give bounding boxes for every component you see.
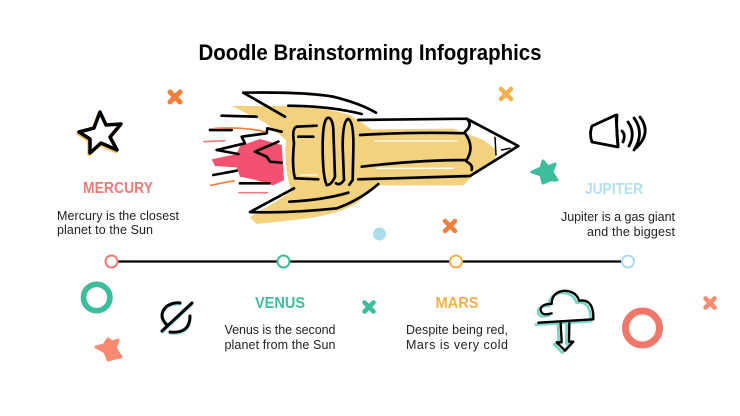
green ring	[84, 284, 110, 311]
text: mercury description: planet to the Sun	[57, 223, 153, 237]
heading: mars: MARS	[436, 295, 478, 312]
green star	[532, 161, 557, 183]
text: jupiter description: and the biggest	[587, 225, 676, 239]
coral star	[96, 339, 121, 360]
green cross	[364, 302, 374, 312]
rocket coloured exhaust lines	[204, 128, 267, 193]
text: jupiter description: Jupiter is a gas giant	[561, 210, 676, 224]
title: Doodle Brainstorming Infographics	[198, 40, 542, 65]
orange cross	[445, 221, 455, 231]
icon: star	[78, 112, 121, 154]
panel: mars	[406, 291, 593, 353]
orange cross	[170, 92, 180, 102]
icon: cloud with arrow	[536, 291, 593, 353]
rocket outlines	[210, 92, 518, 212]
rocket yellow paint	[232, 106, 497, 224]
heading: jupiter: JUPITER	[585, 181, 643, 198]
marker: mars	[450, 256, 462, 268]
text: mercury description: Mercury is the closest	[57, 209, 180, 223]
panel: venus	[162, 295, 336, 352]
icon: crossed circle	[162, 303, 192, 334]
rocket pencil illustration	[204, 92, 518, 224]
timeline	[106, 256, 634, 268]
icon: speaker	[590, 115, 645, 150]
blue dot	[373, 228, 386, 240]
yellow cross	[501, 89, 511, 99]
panel: jupiter	[561, 115, 676, 239]
decorative shapes	[84, 89, 714, 360]
heading: venus: VENUS	[255, 295, 305, 312]
text: venus description: planet from the Sun	[224, 338, 336, 352]
rocket flame	[212, 139, 284, 185]
rocket white highlights	[300, 141, 457, 175]
marker: jupiter	[622, 256, 634, 268]
text: mars description: Despite being red,	[406, 323, 508, 337]
marker: venus	[278, 256, 290, 268]
coral ring	[626, 311, 660, 345]
text: mars description: Mars is very cold	[406, 338, 508, 352]
coral cross	[706, 298, 714, 308]
panel: mercury	[57, 112, 180, 237]
text: venus description: Venus is the second	[224, 323, 336, 337]
heading: mercury: MERCURY	[83, 180, 154, 197]
marker: mercury	[106, 256, 118, 268]
